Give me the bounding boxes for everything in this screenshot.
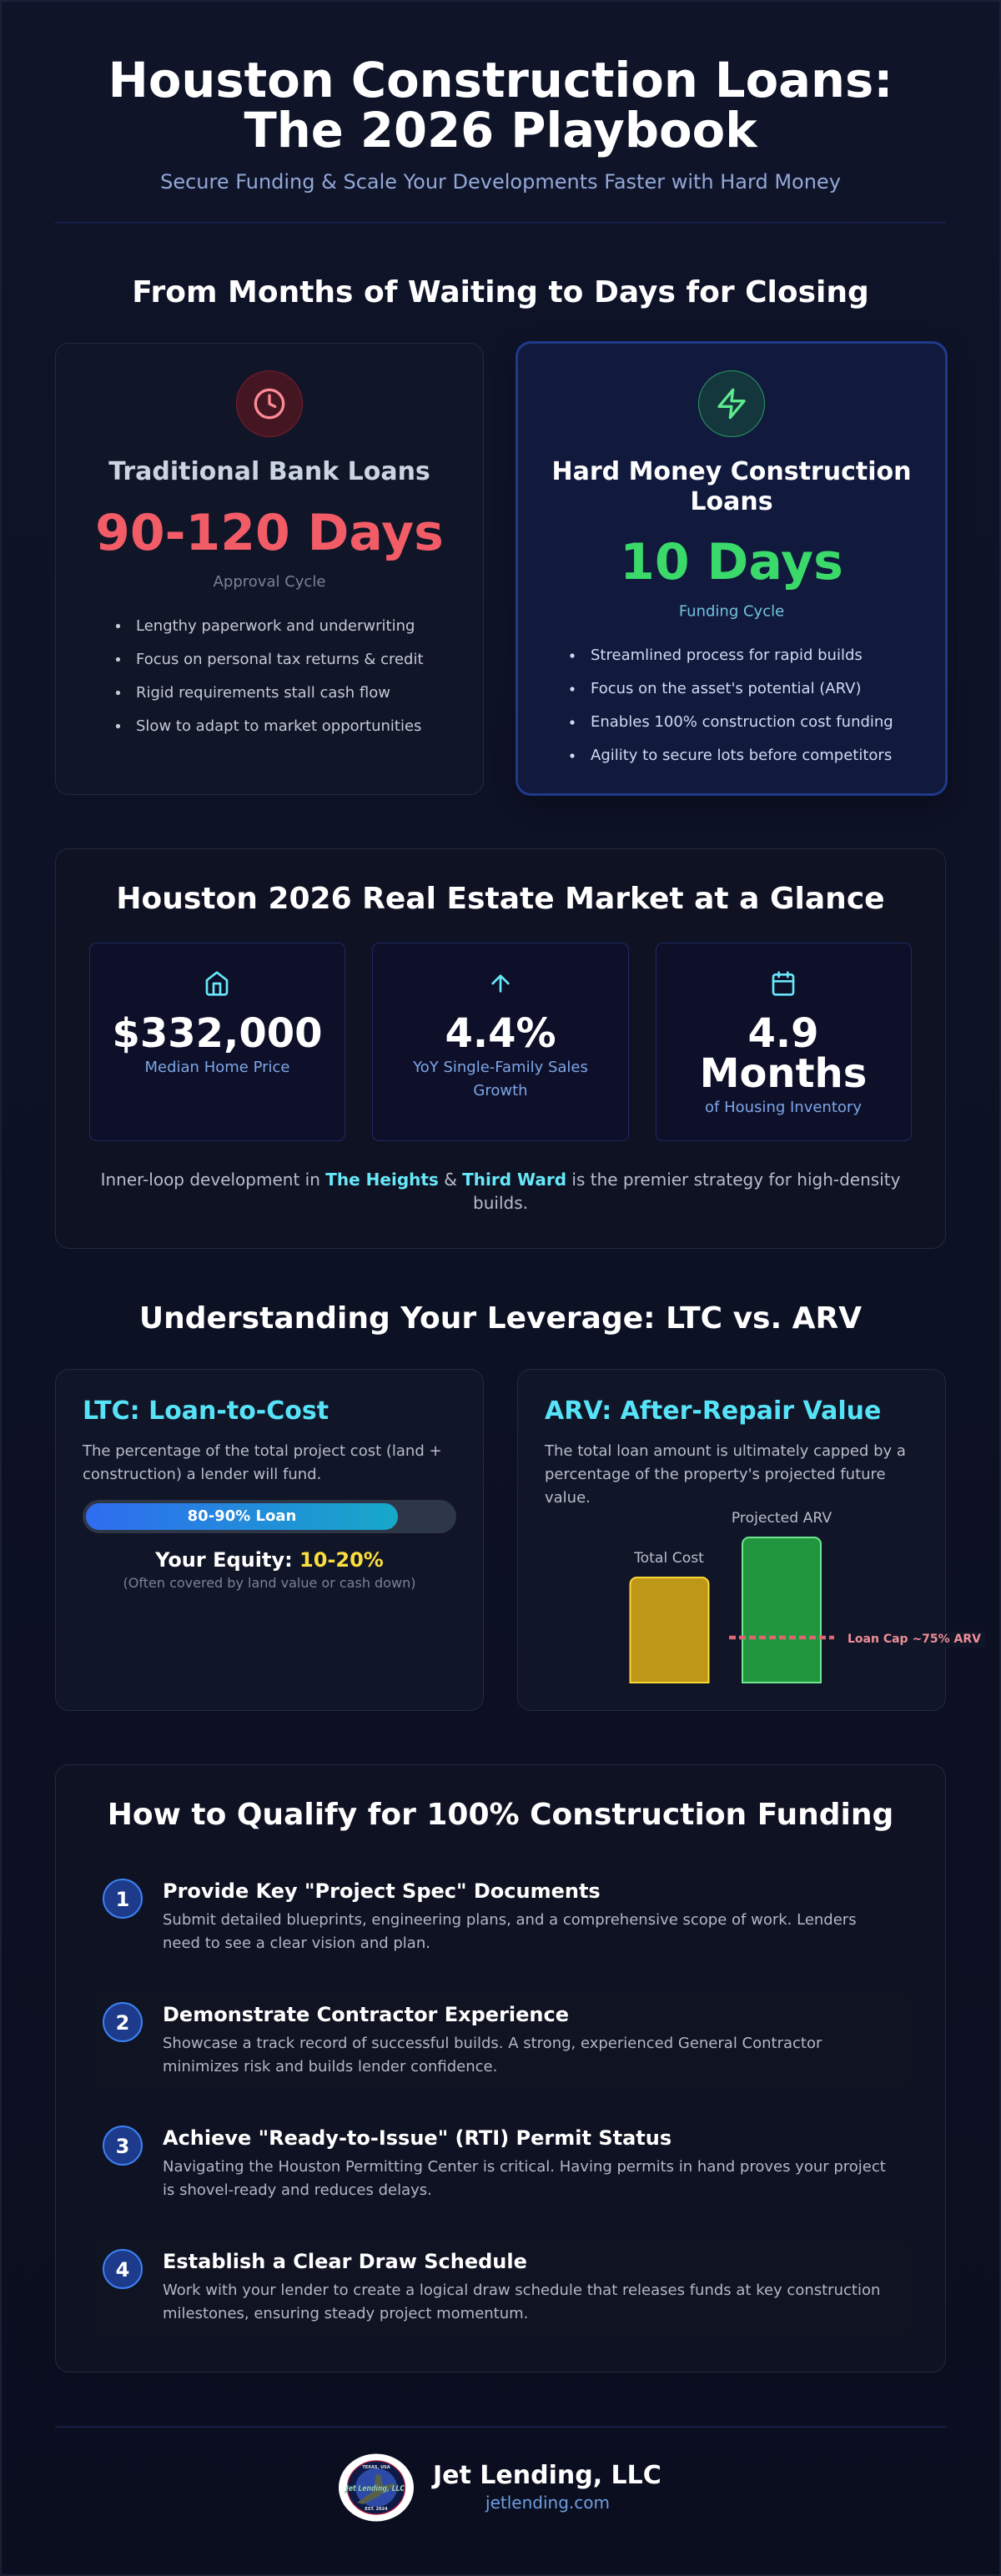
bullet list <box>116 617 424 735</box>
icon: company logo <box>339 2454 414 2521</box>
step 1: Submit detailed blueprints, engineering plans, and a comprehensive scope of work. Lenders <box>163 1911 857 1929</box>
icon: calendar <box>773 973 793 994</box>
step 2: Showcase a track record of successful builds. A strong, experienced General Contractor <box>163 2035 822 2052</box>
icon: company logo: EST. 2024 <box>365 2507 388 2512</box>
description <box>544 1442 906 1507</box>
step 4: Establish a Clear Draw Schedule <box>163 2250 527 2273</box>
step 4 <box>89 2236 912 2340</box>
step 1: need to see a clear vision and plan. <box>163 1935 430 1952</box>
card title: Hard Money Construction <box>552 457 911 486</box>
caption: Approval Cycle <box>214 573 325 591</box>
icon: house <box>207 973 227 994</box>
description: construction) a lender will fund. <box>83 1466 321 1483</box>
step 1 <box>103 1879 857 1952</box>
bullet list: Focus on the asset's potential (ARV) <box>591 680 861 697</box>
bullet list: Focus on personal tax returns & credit <box>136 651 424 668</box>
bar chart: Loan Cap ~75% ARV <box>848 1633 981 1646</box>
icon: arrow up <box>493 976 508 991</box>
icon: clock <box>237 370 302 437</box>
caption: Funding Cycle <box>679 602 784 621</box>
bar chart <box>631 1510 985 1683</box>
bar chart: Projected ARV <box>732 1510 832 1527</box>
step 2: 2 <box>116 2011 129 2035</box>
step 4: Work with your lender to create a logical draw schedule that releases funds at key construction <box>163 2282 880 2299</box>
panel: ARV <box>517 1370 985 1710</box>
stat: housing inventory: 4.9 <box>747 1010 819 1057</box>
description: The total loan amount is ultimately capped by a <box>544 1442 906 1460</box>
big number: 10 Days <box>620 533 843 591</box>
website: jetlending.com <box>485 2493 610 2513</box>
market note: Inner-loop development in The Heights & Third Ward is the premier strategy for high-density <box>101 1170 901 1190</box>
stat: housing inventory <box>656 943 911 1141</box>
stat: housing inventory: of Housing Inventory <box>705 1099 862 1116</box>
step 3: Achieve "Ready-to-Issue" (RTI) Permit Status <box>163 2126 672 2150</box>
title <box>108 53 893 158</box>
step 3: 3 <box>116 2135 129 2158</box>
bullet list: Streamlined process for rapid builds <box>591 647 863 664</box>
panel: how to qualify <box>55 1765 946 2372</box>
bullet list: Rigid requirements stall cash flow <box>136 684 390 702</box>
bar chart: Total Cost <box>633 1550 704 1567</box>
stat: sales growth: YoY Single-Family Sales <box>412 1059 588 1076</box>
panel: hard money construction loans <box>516 342 948 805</box>
heading: comparison: From Months of Waiting to Days for Closing <box>132 275 869 309</box>
big number: 90-120 Days <box>95 504 444 562</box>
card title: Loans <box>690 487 773 516</box>
card title: Traditional Bank Loans <box>108 457 430 486</box>
description: value. <box>545 1489 591 1507</box>
stat: sales growth: Growth <box>473 1082 528 1099</box>
icon: company logo: TEXAS, USA <box>362 2465 390 2470</box>
step 2: Demonstrate Contractor Experience <box>163 2003 569 2026</box>
icon: lightning <box>699 370 764 437</box>
progress bar <box>83 1500 456 1533</box>
title: Houston Construction Loans: <box>108 53 893 108</box>
footer <box>339 2454 661 2521</box>
card title <box>552 457 911 516</box>
bullet list: Slow to adapt to market opportunities <box>136 717 421 735</box>
equity: Your Equity: 10-20% <box>154 1548 384 1572</box>
step 3: is shovel-ready and reduces delays. <box>163 2181 432 2199</box>
stat: housing inventory: Months <box>700 1050 867 1097</box>
description: percentage of the property's projected future <box>545 1466 886 1483</box>
heading: How to Qualify for 100% Construction Funding <box>108 1798 893 1832</box>
step 1: 1 <box>116 1888 129 1911</box>
bullet list: Lengthy paperwork and underwriting <box>136 617 415 635</box>
step 4: milestones, ensuring steady project momentum. <box>163 2305 528 2322</box>
stat: sales growth <box>372 943 629 1141</box>
market note: builds. <box>473 1193 528 1213</box>
bullet list: Enables 100% construction cost funding <box>591 713 893 731</box>
card title: LTC: Loan-to-Cost <box>83 1396 329 1426</box>
step 4: 4 <box>116 2258 129 2282</box>
title: The 2026 Playbook <box>244 103 758 158</box>
step 2: minimizes risk and builds lender confidence. <box>163 2058 497 2075</box>
stat: median home price: $332,000 <box>112 1010 323 1057</box>
step 1: Provide Key "Project Spec" Documents <box>163 1879 601 1903</box>
icon: company logo: Jet Lending, LLC <box>345 2484 405 2493</box>
subtitle: Secure Funding & Scale Your Developments Faster with Hard Money <box>160 170 841 194</box>
step 3 <box>103 2126 886 2199</box>
header <box>108 53 893 194</box>
description <box>82 1442 442 1483</box>
stat: sales growth: 4.4% <box>445 1010 556 1057</box>
stat: median home price <box>90 943 345 1141</box>
panel: market at a glance <box>55 849 946 1248</box>
equity note: (Often covered by land value or cash down) <box>123 1575 415 1591</box>
card title: ARV: After-Repair Value <box>545 1396 881 1426</box>
heading: Houston 2026 Real Estate Market at a Glance <box>116 882 885 916</box>
step 2 <box>89 1989 912 2093</box>
company name: Jet Lending, LLC <box>431 2461 661 2490</box>
heading: leverage: Understanding Your Leverage: LTC vs. ARV <box>139 1301 862 1336</box>
panel: traditional bank loans <box>55 344 484 794</box>
market note <box>101 1170 901 1213</box>
bullet list: Agility to secure lots before competitors <box>591 747 892 764</box>
stat: median home price: Median Home Price <box>145 1059 289 1076</box>
step 3: Navigating the Houston Permitting Center is critical. Having permits in hand proves your project <box>163 2158 886 2176</box>
panel: LTC <box>55 1370 484 1710</box>
progress bar: 80-90% Loan <box>188 1507 296 1525</box>
bullet list <box>570 647 893 764</box>
description: The percentage of the total project cost (land + <box>82 1442 442 1460</box>
